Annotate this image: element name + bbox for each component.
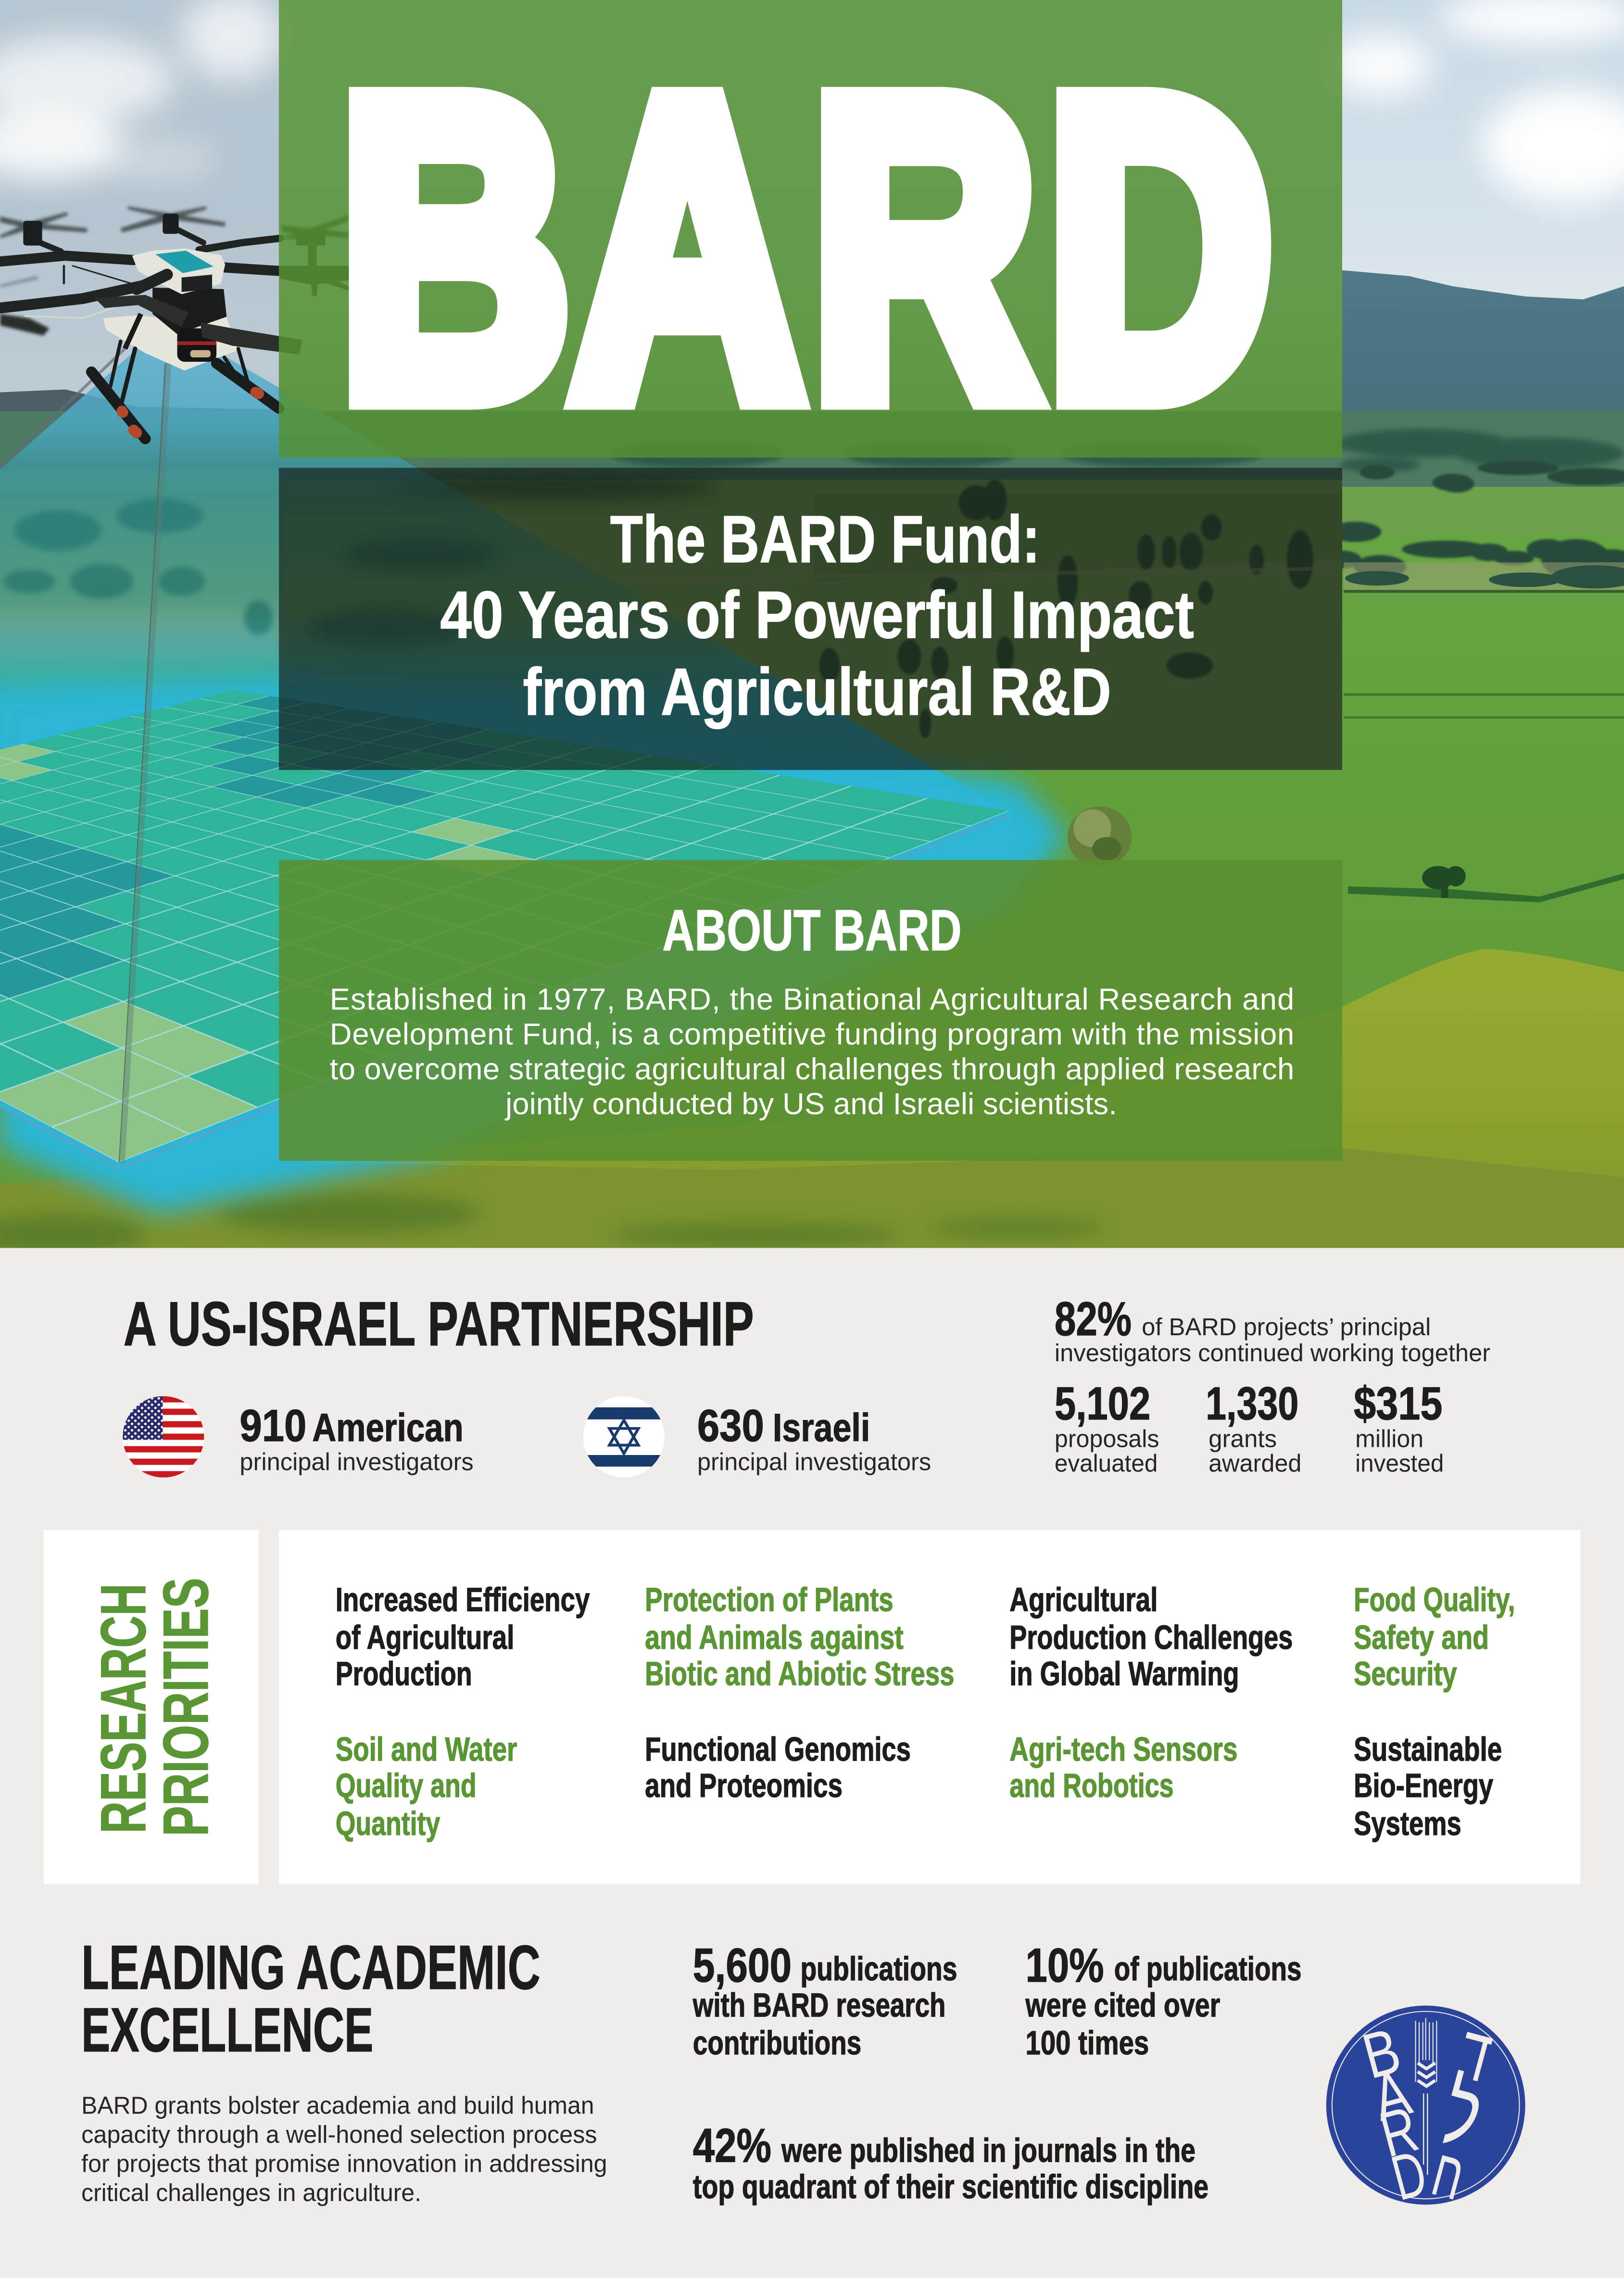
heading: leading academic excellence: EXCELLENCE [81,1995,373,2065]
stat: top quadrant: 42% [693,2119,771,2172]
field band [0,487,1624,533]
stat: proposals: evaluated [1055,1450,1158,1477]
left field band above plane [0,472,283,625]
stat: invested: invested [1355,1450,1444,1477]
tones behind top panel [279,0,1342,459]
green field rows [1344,590,1624,593]
academic body text: BARD grants bolster academia and build human [81,2092,594,2119]
priority: efficiency: Production [336,1655,472,1693]
stat: 82 percent: investigators continued working together [1055,1339,1490,1367]
tree: dark tree in field [1422,866,1466,898]
road behind title panel [279,567,1342,586]
stat: American investigators [239,1400,474,1476]
priority: efficiency [336,1581,590,1693]
stat: top quadrant [693,2119,1209,2205]
priority: agri-tech: and Robotics [1009,1767,1174,1804]
motors [23,214,179,245]
stat: proposals: proposals [1055,1425,1159,1452]
arms [0,229,290,308]
priority: efficiency: Increased Efficiency [336,1581,590,1619]
stat: publications: publications [800,1950,957,1987]
tank strut [125,314,141,349]
lower yellow field [0,949,1624,1248]
about body text: jointly conducted by US and Israeli scientists. [504,1088,1117,1121]
spray tube [25,306,118,318]
stat: American investigators: principal investigators [239,1448,474,1476]
logo: latin letters: A [1366,2057,1418,2135]
priority: soil and water: Quality and [336,1767,477,1804]
sky left [0,0,279,421]
sky right [1342,0,1624,334]
logo: latin letters [1356,2015,1434,2214]
trees behind title panel [819,480,1313,738]
logo: latin letters: B [1356,2015,1408,2093]
clouds [0,0,1624,203]
olive foreground [0,1148,1624,1248]
priority: global warming [1009,1581,1293,1693]
rotor blades lower [0,314,50,336]
background photo: drone over rice fields [0,0,1624,1248]
icon: US flag [122,1396,205,1478]
subtitle: from Agricultural R&D [523,655,1111,729]
priority: agri-tech [1009,1731,1238,1804]
about body text: Development Fund, is a competitive funding program with the mission [330,1018,1294,1051]
stat: American investigators: American [312,1406,464,1450]
priority: bio-energy: Sustainable [1354,1731,1502,1768]
stat: American investigators: 910 [239,1400,306,1451]
stat: grants [1206,1378,1301,1477]
title: BARD: B [340,12,570,484]
stat: grants: awarded [1209,1450,1301,1477]
cyan glow beneath plane [0,683,1068,1213]
heading: leading academic excellence [81,1932,541,2065]
mountains left [0,390,290,480]
priority: plant protection: Biotic and Abiotic Stress [645,1655,955,1693]
stat: 82 percent: 82% [1055,1292,1132,1346]
priority: plant protection: and Animals against [645,1619,904,1656]
stat: top quadrant: were published in journals in the [781,2131,1196,2169]
mountains right [1342,270,1624,421]
arm through body [94,295,189,327]
priority: global warming: in Global Warming [1009,1655,1239,1693]
teal lid [155,251,214,273]
icon: Israel flag [582,1396,665,1478]
priority: food quality [1354,1581,1515,1693]
stat: invested [1354,1378,1444,1477]
grid plane with coloured crop cells [0,690,1009,1162]
beam from drone to plane [119,363,171,1162]
title: BARD: D [1047,12,1272,484]
stat: publications [692,1939,957,2062]
stat: cited publications: were cited over [1025,1986,1220,2024]
woods behind title panel [305,474,719,649]
priority: soil and water [336,1731,517,1842]
tree left [3,498,273,635]
panel: about BARD [279,860,1342,1161]
priority: efficiency: of Agricultural [336,1619,514,1656]
logo: hebrew letters [1424,2010,1500,2215]
priority: global warming: Agricultural [1009,1581,1158,1619]
stat: proposals [1055,1378,1159,1477]
stat: invested: million [1355,1425,1423,1452]
stat: proposals: 5,102 [1055,1378,1150,1430]
logo: hebrew letters: ד [1450,2010,1500,2099]
panel: research priorities label: PRIORITIES [151,1578,222,1836]
stat: cited publications: 100 times [1026,2024,1149,2062]
academic body text: for projects that promise innovation in addressing [81,2150,607,2177]
projection beam tint [0,323,1017,1170]
logo: latin letters: D [1385,2137,1434,2214]
stat: cited publications [1025,1939,1301,2062]
stat: grants: 1,330 [1206,1378,1298,1430]
priority: bio-energy [1354,1731,1502,1842]
subtitle [440,502,1194,729]
stat: 82 percent [1055,1292,1490,1367]
panel: top green BARD panel [279,0,1342,457]
priority: genomics: Functional Genomics [645,1731,911,1768]
plane edge thickness [0,814,1009,1170]
beam edge left [0,349,125,468]
priority: global warming: Production Challenges [1009,1619,1293,1656]
panel: research priorities label: RESEARCH [88,1583,159,1834]
academic body text: critical challenges in agriculture. [81,2179,421,2206]
icon: BARD logo [1326,2006,1525,2215]
about body text: to overcome strategic agricultural challenges through applied research [330,1052,1294,1086]
stat: cited publications: 10% [1026,1939,1104,1992]
priority: plant protection [645,1581,955,1693]
about heading: ABOUT BARD [662,898,962,962]
drone [0,206,349,439]
landing gear [91,342,279,439]
pump cylinder [177,329,216,362]
panel: research priorities list [279,1530,1580,1884]
stat: publications: contributions [693,2024,861,2062]
central black unit [152,288,227,334]
stat: grants: grants [1209,1425,1277,1452]
drone ghost parts behind panel [280,231,349,296]
stat: 82 percent: of BARD projects’ principal [1142,1313,1431,1341]
stat: publications: 5,600 [693,1939,792,1992]
fields behind dark panel [279,480,1342,770]
about body text: Established in 1977, BARD, the Binational Agricultural Research and [330,983,1294,1016]
title: BARD: A [572,12,803,484]
tree belt at horizon [0,411,1624,487]
tree rows right [1326,461,1624,580]
tree: bush by plane [1068,807,1132,868]
road strip right [1344,562,1624,590]
body shell [132,248,225,294]
propellers [0,206,225,288]
subtitle: 40 Years of Powerful Impact [440,578,1194,652]
stat: Israeli investigators [697,1400,931,1476]
priority: food quality: Security [1354,1655,1457,1693]
priority: soil and water: Quantity [336,1805,441,1842]
logo: hebrew letters: ל [1432,2061,1492,2167]
priority: agri-tech: Agri-tech Sensors [1009,1731,1238,1768]
stat: cited publications: of publications [1114,1950,1301,1987]
panel: dark subtitle panel [279,468,1342,770]
priority: bio-energy: Systems [1354,1805,1461,1842]
subtitle: The BARD Fund: [610,502,1040,577]
academic body text: capacity through a well-honed selection process [81,2121,597,2148]
priority: genomics [645,1731,911,1804]
title: BARD: R [812,12,1037,484]
heading: US-Israel partnership: A US-ISRAEL PARTNERSHIP [124,1289,754,1359]
stat: invested: $315 [1354,1378,1442,1430]
logo: latin letters: R [1373,2093,1425,2171]
priority: soil and water: Soil and Water [336,1731,517,1768]
about body text [330,983,1294,1121]
title: BARD [340,12,1272,484]
front vent [182,275,212,292]
priority: plant protection: Protection of Plants [645,1581,894,1619]
priority: food quality: Safety and [1354,1619,1489,1656]
priority: food quality: Food Quality, [1354,1581,1515,1619]
front blade [201,323,302,354]
logo: hebrew letters: ח [1424,2135,1472,2215]
stat: publications: with BARD research [692,1986,945,2024]
panel: research priorities label [44,1530,259,1884]
stat: Israeli investigators: 630 [697,1400,764,1451]
priority: genomics: and Proteomics [645,1767,843,1804]
tank [103,314,238,370]
heading: leading academic excellence: LEADING ACADEMIC [81,1932,541,2002]
logo: wheat [1416,2018,1436,2175]
stat: Israeli investigators: Israeli [773,1406,870,1450]
academic body text [81,2092,607,2206]
priority: bio-energy: Bio-Energy [1354,1767,1493,1804]
stat: Israeli investigators: principal investigators [697,1448,931,1476]
lower background [0,1248,1624,2278]
stat: top quadrant: top quadrant of their scientific discipline [693,2168,1209,2205]
front arm stub [137,275,167,289]
